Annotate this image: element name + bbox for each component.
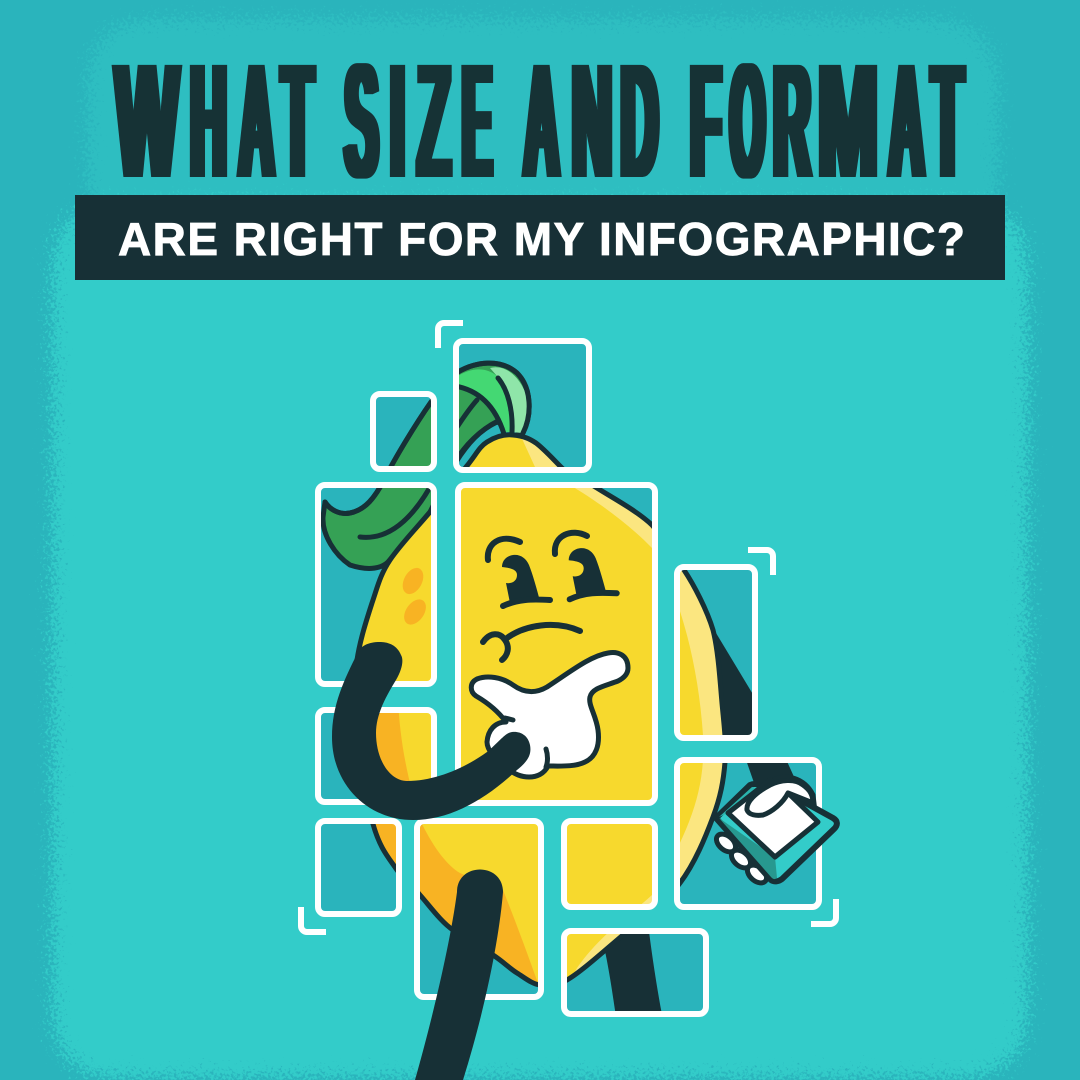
- fingers behind tablet: [713, 831, 770, 886]
- right leg: [606, 934, 662, 1011]
- infographic canvas: T: [932, 29, 963, 212]
- left leg: [415, 870, 503, 1080]
- mouth: [507, 625, 580, 638]
- right hand holding tablet: [713, 777, 837, 886]
- title: A: [239, 29, 274, 212]
- tablet body: [716, 784, 837, 881]
- hand on tablet: [747, 780, 813, 815]
- title: I: [390, 29, 404, 212]
- left brow: [488, 539, 520, 560]
- title: [116, 29, 963, 212]
- lemon illustration seen through frames: [321, 344, 816, 1011]
- corner brackets: [301, 323, 836, 932]
- leaf: [323, 363, 529, 568]
- left eye: [502, 555, 550, 606]
- tablet screen: [728, 780, 818, 857]
- right brow: [555, 533, 587, 554]
- subtitle banner: [75, 195, 1005, 280]
- white frames: [318, 341, 819, 1014]
- title: W: [116, 29, 179, 212]
- cheek curl: [483, 634, 508, 660]
- title: A: [524, 29, 559, 212]
- title: Z: [418, 29, 450, 212]
- left arm: [332, 642, 530, 820]
- lemon body: [340, 425, 740, 1000]
- right arm: [716, 633, 794, 783]
- right eye: [569, 548, 617, 599]
- face: [483, 533, 617, 660]
- title: R: [774, 29, 810, 212]
- palm behind tablet: [770, 777, 815, 812]
- title: E: [462, 29, 492, 212]
- title: A: [889, 29, 924, 212]
- title: D: [621, 29, 658, 212]
- title: M: [818, 29, 878, 212]
- pointing hand: [471, 653, 628, 777]
- title: H: [190, 29, 226, 212]
- title: T: [282, 29, 313, 212]
- title: N: [572, 29, 612, 212]
- tablet bevel top: [719, 787, 760, 817]
- subtitle banner: ARE RIGHT FOR MY INFOGRAPHIC?: [118, 213, 965, 265]
- title: F: [690, 29, 721, 212]
- tablet bevel left: [719, 818, 777, 879]
- title: O: [730, 29, 765, 212]
- title: S: [345, 29, 378, 212]
